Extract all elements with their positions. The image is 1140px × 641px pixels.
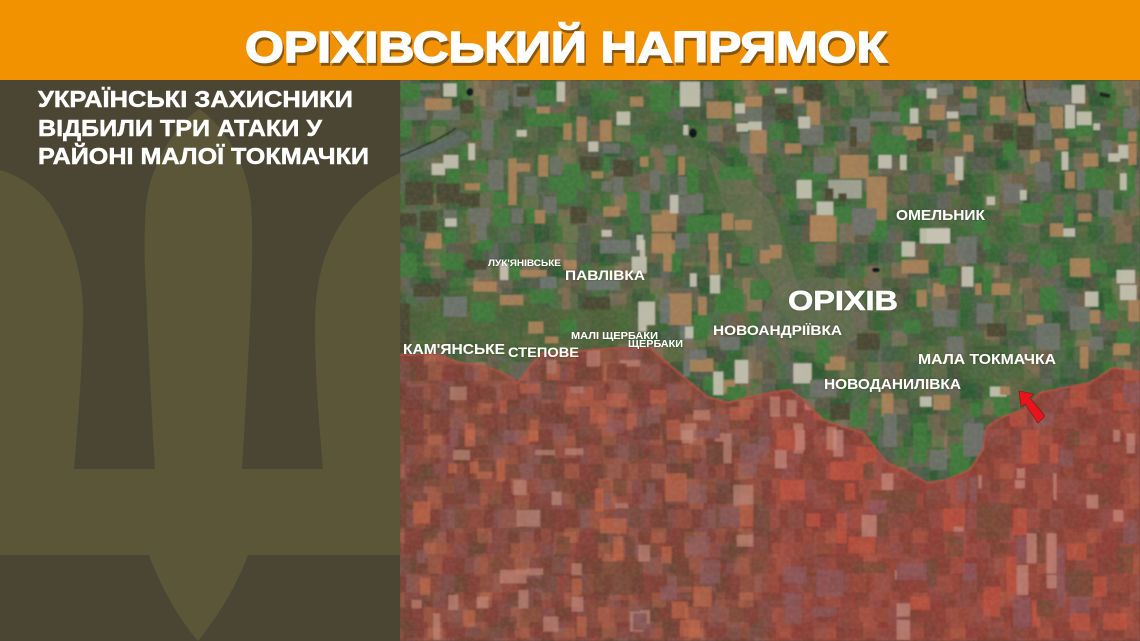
label: Мала Токмачка: МАЛА ТОКМАЧКА xyxy=(918,352,1057,368)
panel heading text xyxy=(38,86,369,169)
red zone: lower right fields xyxy=(775,430,1137,640)
label: Павлівка: ПАВЛІВКА xyxy=(565,267,645,283)
map: settlements and river belts xyxy=(400,80,1140,400)
map: occupied red zone xyxy=(400,340,1140,641)
label: Оріхів: ОРІХІВ xyxy=(788,285,898,316)
left panel xyxy=(0,80,400,641)
map: top-right fields xyxy=(770,82,1137,250)
red zone: lower left fields xyxy=(407,430,770,640)
panel heading text: РАЙОНІ МАЛОЇ ТОКМАЧКИ xyxy=(38,142,369,169)
map: middle-right fields xyxy=(770,203,1140,477)
map: top-left fields xyxy=(400,82,770,250)
label: Новоандріївка: НОВОАНДРІЇВКА xyxy=(713,322,842,338)
panel heading text: УКРАЇНСЬКІ ЗАХИСНИКИ xyxy=(38,86,353,112)
settlement labels xyxy=(403,207,1057,393)
label: Омельник: ОМЕЛЬНИК xyxy=(896,207,986,224)
red zone: upper band fields xyxy=(400,347,750,440)
title: ОРІХІВСЬКИЙ НАПРЯМОК xyxy=(245,21,887,72)
header bar xyxy=(0,0,1140,80)
label: Щербаки: ЩЕРБАКИ xyxy=(628,339,683,350)
satellite map xyxy=(400,80,1140,641)
label: Кам'янське: КАМ'ЯНСЬКЕ xyxy=(403,341,505,358)
trident emblem xyxy=(0,109,400,641)
label: Степове: СТЕПОВЕ xyxy=(508,344,579,360)
label: Малі Щербаки: МАЛІ ЩЕРБАКИ xyxy=(571,331,658,342)
map: middle-left fields xyxy=(400,240,770,400)
label: Новоданилівка: НОВОДАНИЛІВКА xyxy=(824,376,961,393)
panel heading text: ВІДБИЛИ ТРИ АТАКИ У xyxy=(38,115,322,141)
label: Лук'янівське: ЛУК'ЯНІВСЬКЕ xyxy=(488,258,561,269)
arrow: attack direction xyxy=(1019,391,1045,423)
